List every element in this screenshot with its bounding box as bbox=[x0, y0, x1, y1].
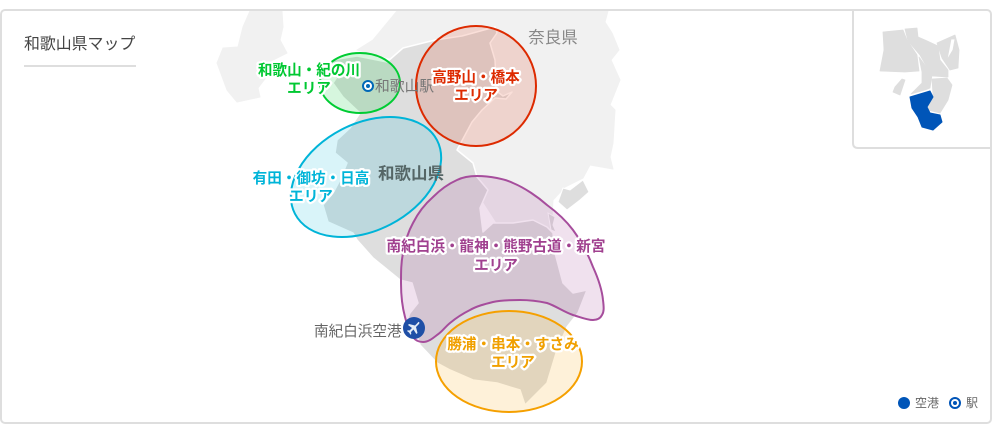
legend: station: 駅 bbox=[966, 396, 978, 410]
icon: Wakayama station bbox=[363, 81, 373, 91]
heading bbox=[24, 35, 136, 67]
land: western peninsula bbox=[217, 11, 287, 102]
land: Wakayama prefecture bbox=[323, 27, 587, 405]
label: Wakayama and Kinokawa area: エリア bbox=[287, 81, 331, 97]
heading: 和歌山県マップ bbox=[24, 35, 135, 53]
land: Osaka, Nara and Mie bbox=[357, 11, 620, 290]
area: Wakayama and Kinokawa bbox=[320, 53, 400, 113]
legend bbox=[898, 396, 978, 410]
icon: airport bbox=[403, 317, 425, 339]
label: Arida, Gobo and Hidaka area: 有田・御坊・日高 bbox=[253, 169, 369, 187]
map base: surrounding prefectures and Wakayama bbox=[217, 11, 620, 405]
mini map: other regions bbox=[880, 28, 959, 113]
label: Wakayama prefecture: 和歌山県 bbox=[378, 164, 444, 183]
label: Katsuura, Kushimoto and Susami area: エリア bbox=[491, 355, 535, 371]
label: Shirahama, Ryujin, Kumano and Shingu area: エリア bbox=[474, 258, 518, 274]
label: Koyasan and Hashimoto area bbox=[432, 69, 520, 104]
label: Shirahama, Ryujin, Kumano and Shingu area: 南紀白浜・龍神・熊野古道・新宮 bbox=[387, 237, 605, 255]
label: Koyasan and Hashimoto area: 高野山・橋本 bbox=[432, 69, 520, 86]
label: Arida, Gobo and Hidaka area: エリア bbox=[289, 189, 333, 205]
area: Shirahama, Ryujin, Kumano and Shingu bbox=[401, 176, 604, 342]
area: Koyasan and Hashimoto bbox=[416, 26, 536, 146]
area: Katsuura, Kushimoto and Susami bbox=[436, 311, 582, 412]
land: Mie coast bbox=[558, 180, 589, 210]
mini map: highlighted region bbox=[910, 91, 942, 130]
legend: airport: 空港 bbox=[915, 396, 939, 410]
land: Kitayama enclave bbox=[548, 213, 556, 232]
label: Wakayama station: 和歌山駅 bbox=[375, 78, 434, 95]
panel: locator mini map bbox=[853, 10, 991, 148]
label: Shirahama, Ryujin, Kumano and Shingu area bbox=[387, 237, 605, 274]
label: Wakayama and Kinokawa area: 和歌山・紀の川 bbox=[258, 62, 360, 79]
area: Arida, Gobo and Hidaka bbox=[270, 93, 462, 261]
label: Katsuura, Kushimoto and Susami area bbox=[447, 335, 579, 371]
label: Arida, Gobo and Hidaka area bbox=[253, 169, 369, 205]
label: Nanki-Shirahama airport: 南紀白浜空港 bbox=[314, 323, 402, 340]
label: Katsuura, Kushimoto and Susami area: 勝浦・串本・すさみ bbox=[447, 335, 579, 353]
label: Koyasan and Hashimoto area: エリア bbox=[454, 88, 498, 104]
label: Nara prefecture: 奈良県 bbox=[528, 28, 578, 47]
label: Wakayama and Kinokawa area bbox=[258, 62, 360, 97]
